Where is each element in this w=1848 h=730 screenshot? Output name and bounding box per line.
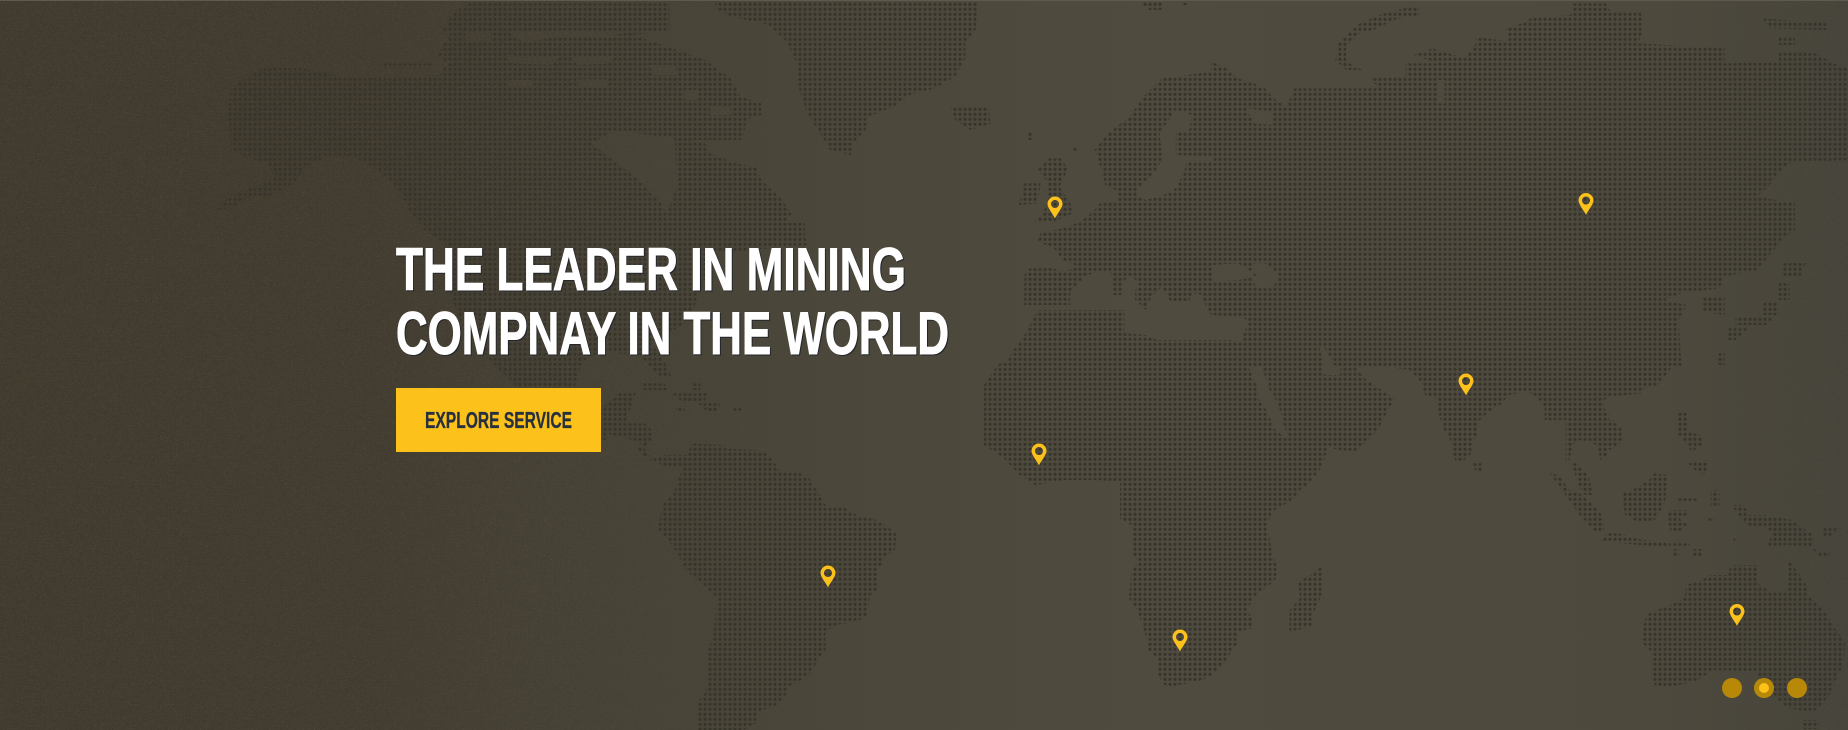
button: explore service — [396, 388, 601, 452]
heading — [396, 236, 949, 367]
heading: COMPNAY IN THE WORLD — [396, 300, 949, 367]
icon: location pin Brazil — [820, 566, 836, 588]
icon: location pin South Africa — [1172, 630, 1188, 652]
slider pagination dots — [1722, 678, 1807, 698]
icon: location pin India — [1458, 374, 1474, 396]
icon: location pin Russia — [1578, 193, 1594, 215]
button: explore service: EXPLORE SERVICE — [425, 407, 572, 433]
icon: location pin Australia — [1730, 604, 1744, 626]
heading: THE LEADER IN MINING — [396, 236, 906, 303]
icon: location pin West Africa — [1032, 444, 1046, 466]
icon: location pin Europe — [1048, 196, 1062, 218]
